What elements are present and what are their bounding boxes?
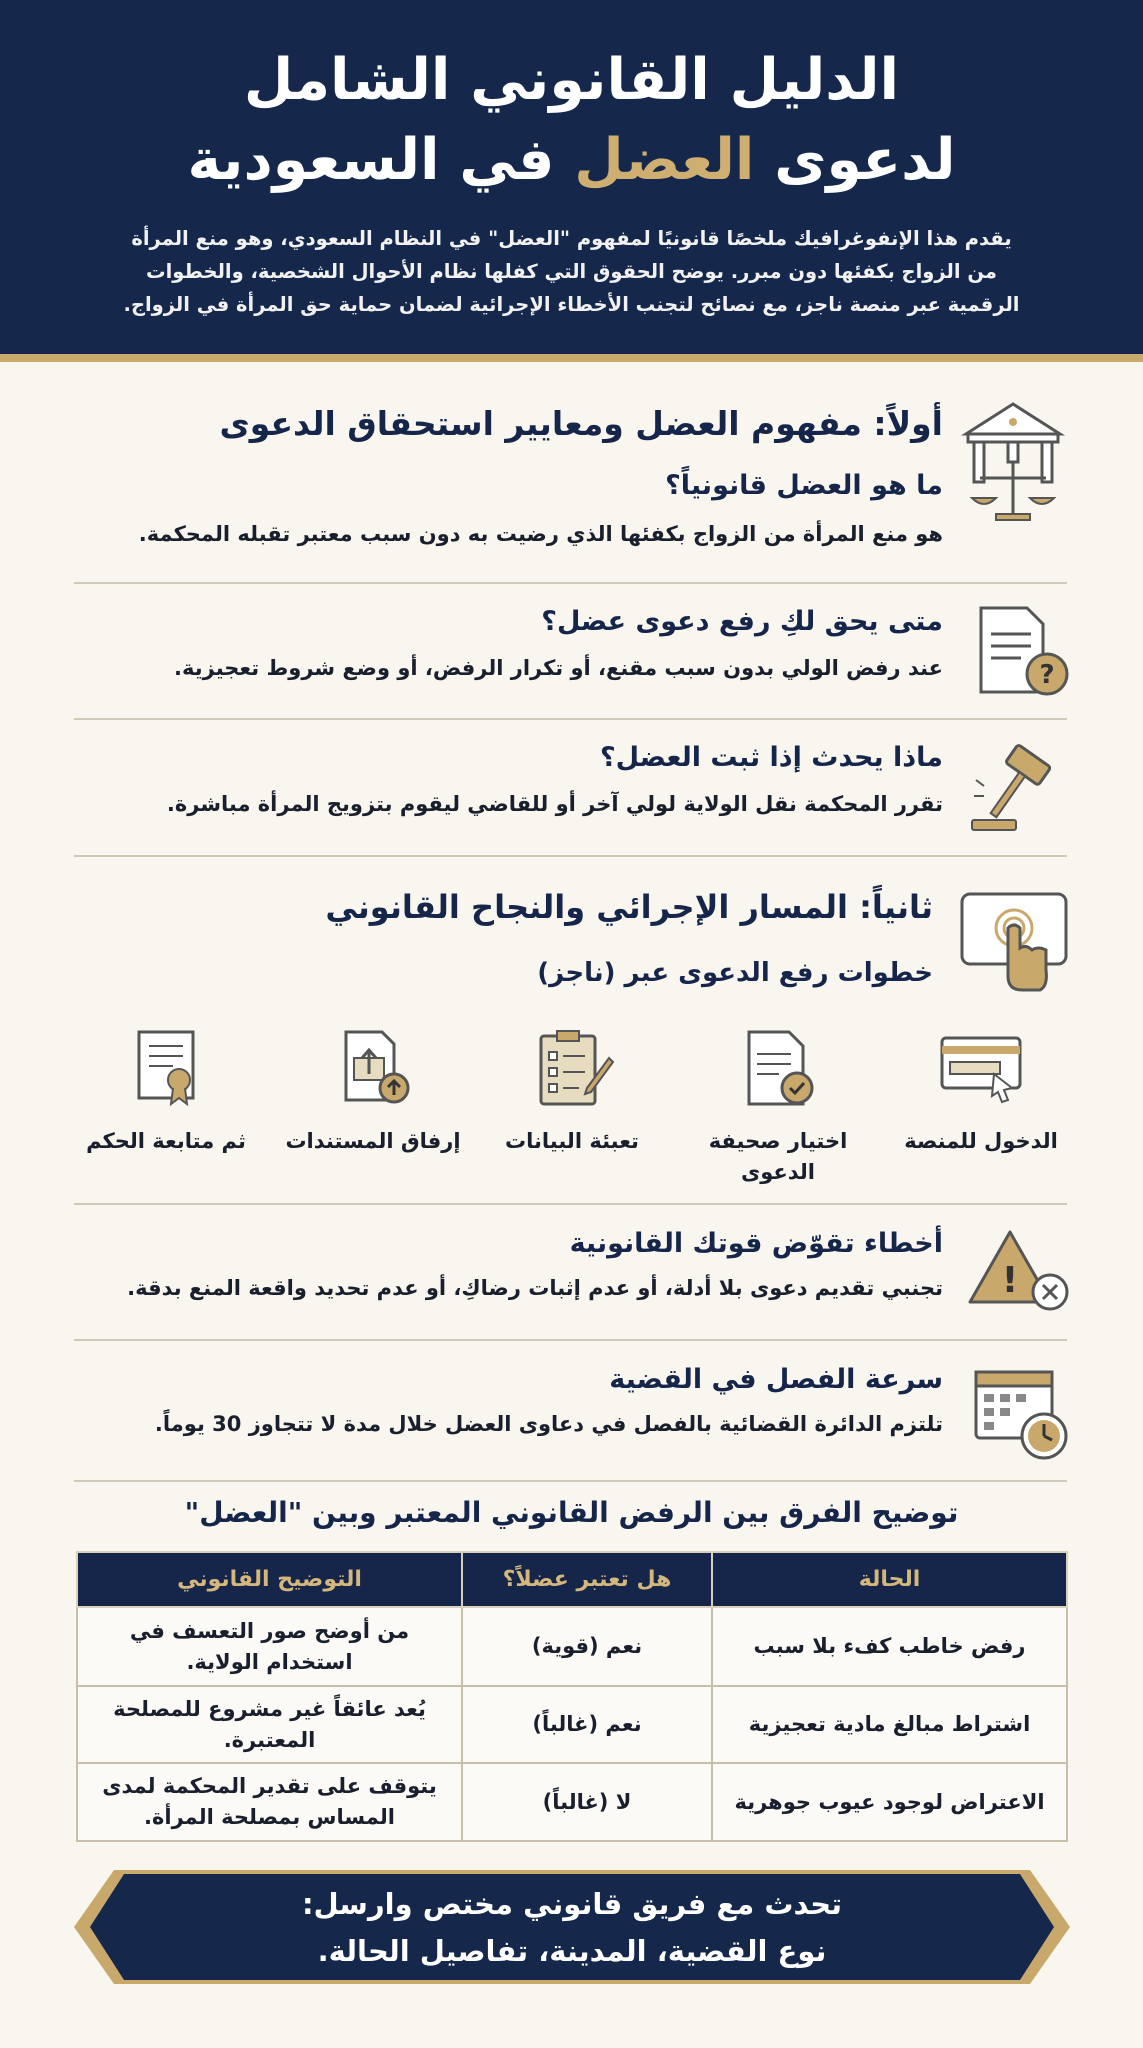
item: if proven: ماذا يحدث إذا ثبت العضل؟: [600, 742, 943, 773]
step: login: الدخول للمنصة: [904, 1129, 1058, 1153]
comparison table: استخدام الولاية.: [186, 1650, 353, 1674]
subheading steps: خطوات رفع الدعوى عبر (ناجز): [537, 958, 933, 988]
CTA text: نوع القضية، المدينة، تفاصيل الحالة.: [318, 1934, 826, 1968]
step: choose form: [709, 1030, 847, 1184]
comparison table: التوضيح القانوني: [177, 1567, 362, 1592]
title: [187, 47, 956, 193]
icon: warning: [968, 1230, 1068, 1310]
section 1 heading: أولاً: مفهوم العضل ومعايير استحقاق الدعوى: [220, 404, 943, 443]
step: choose form: الدعوى: [741, 1160, 815, 1184]
step: follow ruling: [86, 1030, 246, 1153]
intro text: يقدم هذا الإنفوغرافيك ملخصًا قانونيًا لمفهوم "العضل" في النظام السعودي، وهو منع المرأة من الزواج بكفئها دون مبرر. يوضح الحقوق التي كفلها نظام الأحوال الشخصية، والخطوات الرقمية عبر منصة ناجز، مع نصائح لتجنب الأخطاء الإجرائية لضمان حماية حق المرأة في الزواج.: [124, 227, 1019, 316]
item: mistakes: أخطاء تقوّض قوتك القانونية: [570, 1228, 943, 1259]
comparison table: رفض خاطب كفء بلا سبب: [753, 1634, 1026, 1658]
item: speed: سرعة الفصل في القضية: [609, 1364, 943, 1395]
CTA text: [302, 1887, 842, 1968]
item: if proven: [167, 742, 943, 816]
title: الدليل القانوني الشامل: [244, 47, 899, 113]
step: attach documents: [285, 1030, 461, 1154]
comparison table: الحالة: [859, 1567, 920, 1592]
item: speed: تلتزم الدائرة القضائية بالفصل في دعاوى العضل خلال مدة لا تتجاوز 30 يوماً.: [155, 1412, 943, 1436]
step: fill data: [505, 1030, 639, 1153]
item: mistakes: [127, 1225, 943, 1300]
item: when file: متى يحق لكِ رفع دعوى عضل؟: [541, 606, 943, 637]
step: choose form: اختيار صحيفة: [709, 1129, 847, 1153]
comparison table: الاعتراض لوجود عيوب جوهرية: [734, 1790, 1045, 1814]
item: when file: [174, 606, 943, 680]
section 2 heading: ثانياً: المسار الإجرائي والنجاح القانوني: [325, 888, 933, 926]
item: what is adl: هو منع المرأة من الزواج بكفئها الذي رضيت به دون سبب معتبر تقبله المحكمة.: [139, 522, 943, 546]
steps row: [86, 1030, 1058, 1184]
header panel: [0, 0, 1143, 362]
item: speed: [155, 1364, 943, 1436]
step: fill data: تعبئة البيانات: [505, 1129, 639, 1153]
item: if proven: تقرر المحكمة نقل الولاية لولي آخر أو للقاضي ليقوم بتزويج المرأة مباشرة.: [167, 792, 943, 816]
item: when file: عند رفض الولي بدون سبب مقنع، أو تكرار الرفض، أو وضع شروط تعجيزية.: [174, 656, 943, 680]
icon: courthouse scales: [961, 402, 1065, 521]
title: لدعوى العضل في السعودية: [187, 127, 956, 193]
comparison table: يتوقف على تقدير المحكمة لمدى: [102, 1774, 437, 1798]
step: attach documents: إرفاق المستندات: [285, 1129, 461, 1153]
CTA text: تحدث مع فريق قانوني مختص وارسل:: [302, 1887, 842, 1921]
comparison table: نعم (قوية): [532, 1634, 642, 1658]
icon: tablet touch: [960, 892, 1068, 992]
comparison table: من أوضح صور التعسف في: [130, 1618, 409, 1642]
comparison table: يُعد عائقاً غير مشروع للمصلحة: [113, 1696, 426, 1720]
item: what is adl: ما هو العضل قانونياً؟: [665, 470, 943, 501]
icon: document question: ?: [1039, 660, 1055, 690]
icon: warning: !: [1002, 1260, 1018, 1301]
comparison table: اشتراط مبالغ مادية تعجيزية: [749, 1712, 1030, 1736]
comparison table: لا (غالباً): [543, 1790, 631, 1814]
icon: calendar stopwatch: [974, 1370, 1068, 1460]
comparison table: المعتبرة.: [224, 1728, 315, 1752]
comparison table: نعم (غالباً): [532, 1712, 642, 1736]
comparison table: المساس بمصلحة المرأة.: [144, 1805, 395, 1829]
table title: توضيح الفرق بين الرفض القانوني المعتبر وبين "العضل": [185, 1496, 958, 1529]
CTA banner: [74, 1870, 1070, 1984]
icon: gavel: [971, 744, 1052, 831]
item: what is adl: [139, 466, 943, 546]
item: mistakes: تجنبي تقديم دعوى بلا أدلة، أو عدم إثبات رضاكِ، أو عدم تحديد واقعة المنع بدقة.: [127, 1276, 943, 1300]
step: follow ruling: ثم متابعة الحكم: [86, 1129, 246, 1153]
comparison table: [76, 1551, 1068, 1842]
step: login: [904, 1036, 1058, 1154]
comparison table: هل تعتبر عضلاً؟: [503, 1567, 671, 1592]
icon: document question: [980, 606, 1068, 696]
